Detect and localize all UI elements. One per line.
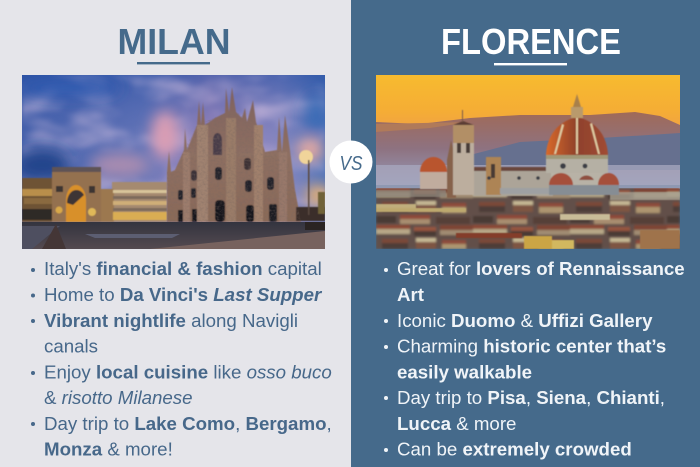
photo: Milan cathedral at dusk bbox=[14, 75, 330, 249]
text block: Milan bullet list: Italy's financial & fashion capital bbox=[44, 258, 322, 279]
text block: Milan bullet list: Day trip to Lake Como, Bergamo, bbox=[44, 413, 332, 434]
text block: Florence bullet list bbox=[384, 258, 685, 460]
heading: Florence: FLORENCE bbox=[441, 21, 621, 62]
text block: Florence bullet list: Great for lovers of Rennaissance bbox=[397, 258, 685, 279]
panel: Milan background bbox=[0, 0, 351, 467]
text block: Milan bullet list bbox=[31, 258, 332, 460]
text block: Florence bullet list: Can be extremely crowded bbox=[397, 438, 632, 460]
text block: Milan bullet list: Monza & more! bbox=[44, 438, 173, 460]
square pavement bbox=[22, 222, 325, 249]
text block: Milan bullet list: Enjoy local cuisine like osso buco bbox=[44, 362, 332, 382]
galleria arch bbox=[52, 170, 101, 222]
badge: VS circle: VS bbox=[340, 153, 363, 175]
left buildings bbox=[22, 167, 167, 222]
text block: Florence bullet list: Iconic Duomo & Uffizi Gallery bbox=[397, 310, 653, 331]
text block: Florence bullet list: easily walkable bbox=[397, 362, 532, 382]
street lamp bbox=[299, 150, 325, 215]
cathedral bbox=[167, 87, 325, 222]
photo: Florence skyline at sunset bbox=[376, 75, 680, 249]
stone grain on the cathedral bbox=[167, 112, 301, 222]
panel: Florence background bbox=[351, 0, 700, 467]
text block: Florence bullet list: Lucca & more bbox=[397, 413, 516, 434]
heading: Milan: MILAN bbox=[118, 21, 230, 62]
text block: Milan bullet list: Vibrant nightlife along Navigli bbox=[44, 310, 298, 331]
badge: VS circle bbox=[330, 140, 372, 184]
text block: Milan bullet list: & risotto Milanese bbox=[44, 387, 193, 408]
text block: Milan bullet list: Home to Da Vinci's Last Supper bbox=[44, 284, 323, 305]
city bbox=[376, 188, 680, 249]
text block: Florence bullet list: Charming historic center that’s bbox=[397, 336, 666, 356]
cathedral complex bbox=[420, 94, 619, 198]
text block: Florence bullet list: Art bbox=[397, 284, 424, 305]
text block: Milan bullet list: canals bbox=[44, 336, 98, 356]
text block: Florence bullet list: Day trip to Pisa, Siena, Chianti, bbox=[397, 387, 665, 408]
